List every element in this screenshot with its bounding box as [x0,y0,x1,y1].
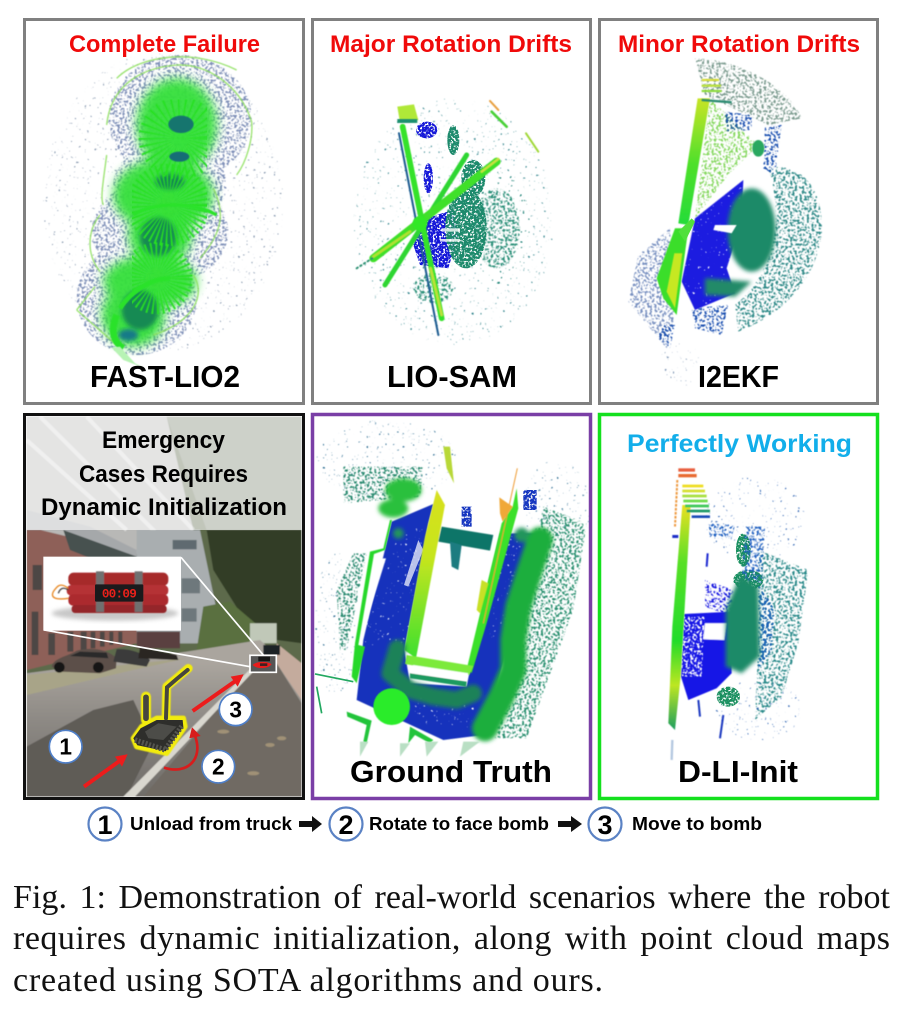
inset: time bomb image [43,557,181,631]
step 1 badge: 1 [97,810,113,840]
label: LIO-SAM: LIO-SAM [387,359,517,394]
heading: Emergency Cases Requires Dynamic Initialization: Dynamic Initialization [41,494,287,521]
panel: ground truth map [312,414,590,798]
panel: LIO-SAM major rotation drifts [312,20,590,404]
heading: Minor Rotation Drifts: Minor Rotation Drifts [618,31,860,58]
badge 1 [49,730,82,763]
inset: time bomb image: 00:09 [102,586,137,601]
badge 3 [219,693,252,726]
step 3 badge: 3 [597,810,613,840]
photo background: street scene [27,417,302,797]
caption: requires dynamic initialization, along with point cloud maps [13,920,890,957]
heading: Emergency Cases Requires Dynamic Initialization: Cases Requires [79,461,248,488]
heading: Major Rotation Drifts: Major Rotation Drifts [330,31,572,58]
step 2 badge: 2 [338,810,354,840]
step 3 label: Move to bomb [632,814,762,834]
leader lines to bomb [44,557,263,667]
text backdrop overlay [27,417,302,530]
heading: Emergency Cases Requires Dynamic Initialization [41,427,287,521]
marker: bomb location box [250,655,276,672]
panel: I2EKF minor rotation drifts [600,20,878,404]
legend: three step sequence [88,808,762,840]
point cloud: I2EKF [628,58,822,392]
step 2 label: Rotate to face bomb [369,814,549,834]
heading: Emergency Cases Requires Dynamic Initialization: Emergency [102,427,226,454]
badge 3: 3 [229,696,242,722]
photo frame [24,414,304,798]
heading: Perfectly Working: Perfectly Working [627,430,852,458]
step 2 badge [330,808,362,840]
badge 2: 2 [212,754,225,780]
arrow: step 2 to 3 [558,816,582,832]
panel: emergency scene photo [24,414,304,798]
panel: D-LI-Init perfectly working [600,414,878,798]
step 3 badge [588,808,622,840]
badge 1: 1 [59,734,72,760]
panel: FAST-LIO2 complete failure [24,20,304,404]
arrow: step 3 [193,674,244,711]
step 1 badge [88,808,122,840]
label: FAST-LIO2: FAST-LIO2 [90,359,240,394]
arrow: step 1 to 2 [299,816,322,832]
label: D-LI-Init: D-LI-Init [678,754,798,789]
caption: Fig. 1: Demonstration of real-world scenarios where the robot [13,879,891,916]
label: I2EKF: I2EKF [698,359,779,394]
arrow: step 2 rotation [164,727,201,770]
caption [13,879,891,999]
arrow: step 1 [84,754,128,787]
icon: robot [133,668,188,753]
badge 2 [202,750,235,783]
step 1 label: Unload from truck [130,814,293,834]
heading: Complete Failure: Complete Failure [69,31,260,58]
label: Ground Truth: Ground Truth [350,754,552,789]
point cloud: D-LI-Init [668,468,808,760]
point cloud: LIO-SAM [353,98,553,345]
cars [52,649,117,673]
point cloud: ground truth [315,420,590,757]
caption: created using SOTA algorithms and ours. [13,962,603,999]
point cloud: FAST-LIO2 [43,52,283,368]
